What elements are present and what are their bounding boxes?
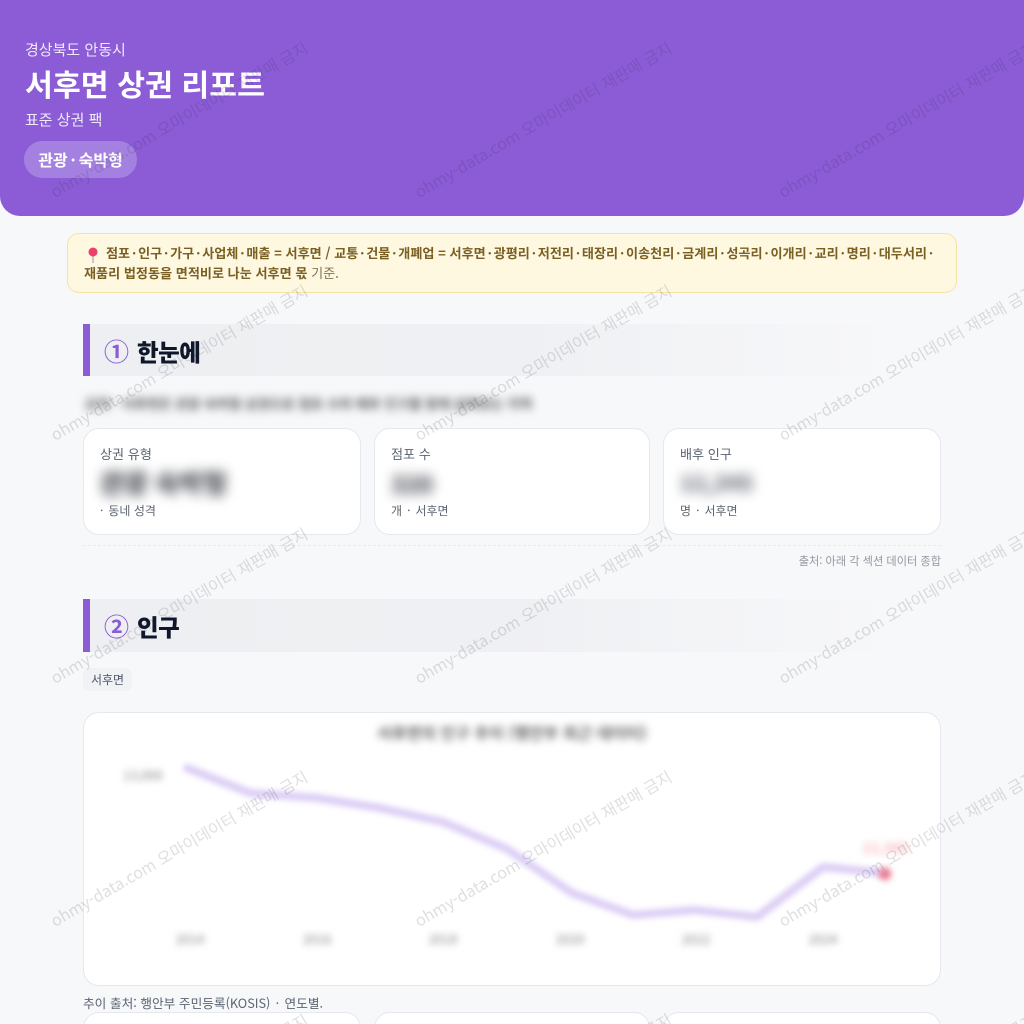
card row partial: middle [374,1012,650,1024]
note: · 동네 성격 [100,502,156,518]
dashed divider and source [83,545,941,571]
region label: 경상북도 안동시 [25,39,126,60]
section number: ② [104,608,129,644]
source note: 출처: 아래 각 섹션 데이터 종합 [799,553,941,569]
title: 서후면 상권 리포트 [25,61,265,105]
x axis labels: 2016 [303,929,331,948]
chart source: 추이 출처: 행안부 주민등록(KOSIS) · 연도별. [83,993,323,1012]
icon: location pin [88,248,98,263]
notice text [84,243,933,282]
blurred value: 관광 숙박형 [100,464,227,501]
x axis labels [176,929,837,948]
x axis labels: 2014 [176,929,204,948]
blurred value: 12,345 [680,467,753,498]
tag: area: 서후면 [91,671,124,688]
card: population [663,428,941,535]
note: 명 · 서후면 [680,502,738,518]
note: 개 · 서후면 [391,502,449,518]
section title: 한눈에 [137,334,200,368]
blurred summary text: 요약 · 서후면은 관광 숙박형 상권으로 점포 수와 배후 인구를 함께 살펴보는 지역 [85,393,532,413]
x axis labels: 2022 [682,929,710,948]
watermarks: ohmy-data.com 오마이데이터 재판매 금지 [410,35,676,203]
header banner [0,0,1024,216]
x axis labels: 2024 [809,929,837,948]
chart title: 서후면의 인구 추이 (행안부 최근 데이터) [377,720,647,744]
x axis labels: 2020 [556,929,584,948]
watermarks: ohmy-data.com 오마이데이터 재판매 금지 [410,764,676,932]
watermarks: ohmy-data.com 오마이데이터 재판매 금지 [46,521,312,689]
watermarks: ohmy-data.com 오마이데이터 재판매 금지 [46,764,312,932]
notice box [67,233,957,293]
card: store count [374,428,650,535]
label: 점포 수 [391,444,431,463]
latest value label: 12,345 [862,838,908,858]
latest point [879,868,891,880]
tag: area [83,668,132,691]
watermarks: ohmy-data.com 오마이데이터 재판매 금지 [46,278,312,446]
section title: 인구 [137,609,179,643]
watermarks: ohmy-data.com 오마이데이터 재판매 금지 [410,521,676,689]
notice text: 재품리 법정동을 면적비로 나눈 서후면 몫 기준. [84,262,339,282]
card: commercial type [83,428,361,535]
population line [187,768,885,917]
card row partial: right [663,1012,941,1024]
badge: commercial type: 관광·숙박형 [38,147,123,171]
panel: population line chart [83,712,941,986]
section heading: population [83,599,941,652]
watermarks: ohmy-data.com 오마이데이터 재판매 금지 [46,35,312,203]
badge: commercial type [24,141,137,178]
section number: ① [104,333,129,369]
notice text: 점포·인구·가구·사업체·매출 = 서후면 / 교통·건물·개폐업 = 서후면·광평리·저전리·태장리·이송천리·금계리·성곡리·이개리·교리·명리·대두서리· [106,243,933,262]
y axis label: 13,000 [123,765,163,784]
blurred value: 320 [391,466,433,500]
chart: population trend [122,720,910,948]
section heading: at a glance [83,324,941,376]
card row partial: left [83,1012,361,1024]
label: 배후 인구 [680,444,732,463]
subtitle: 표준 상권 팩 [25,109,102,130]
x axis labels: 2018 [429,929,457,948]
label: 상권 유형 [100,444,152,463]
watermarks: ohmy-data.com 오마이데이터 재판매 금지 [410,278,676,446]
